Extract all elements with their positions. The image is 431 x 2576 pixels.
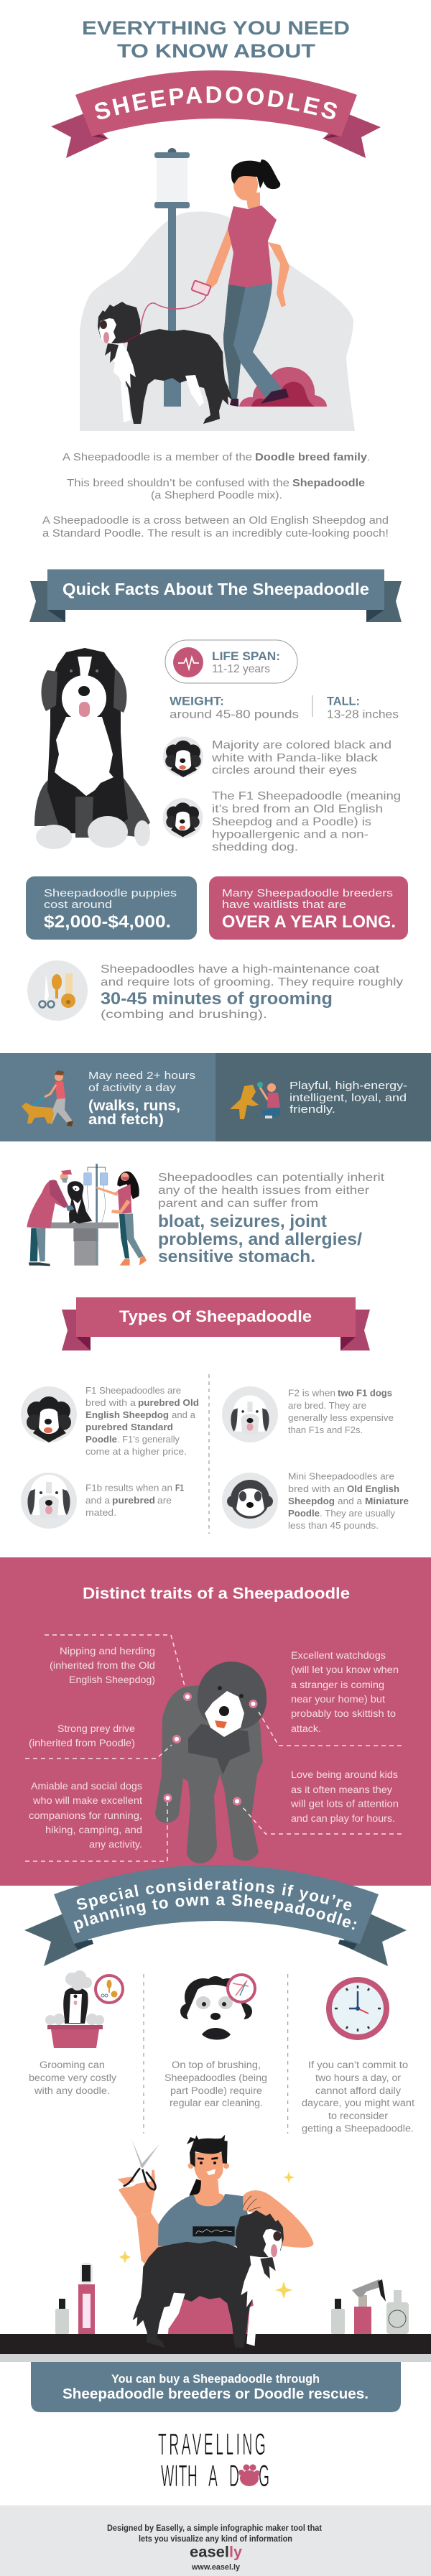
- type: mini: [222, 1471, 409, 1531]
- groomer: [117, 2135, 314, 2265]
- type: F1: purebred Standard: [85, 1422, 173, 1432]
- type: mini: Old English: [347, 1484, 399, 1494]
- fact: coloring: circles around their eyes: [212, 764, 357, 777]
- trait: amiable: who will make excellent: [32, 1795, 142, 1806]
- fact: coloring: white with Panda-like black: [211, 752, 379, 764]
- consideration: grooming cost: Grooming can: [40, 2060, 105, 2070]
- trait: kids: Love being around kids: [291, 1769, 398, 1780]
- weight stat: [170, 695, 299, 721]
- illustration: groomer with dog: [55, 2135, 409, 2348]
- consideration: ear cleaning: regular ear cleaning.: [170, 2098, 263, 2108]
- illustration: sitting sheepadoodle: [34, 648, 150, 849]
- trait: prey drive: (inherited from Poodle): [29, 1738, 135, 1748]
- life span pill: 11-12 years: [212, 663, 270, 675]
- icon: person walking dog: [22, 1070, 73, 1126]
- panel: temperament: intelligent, loyal, and: [289, 1092, 407, 1104]
- consideration: time commitment: cannot afford daily: [315, 2085, 401, 2096]
- icon: dog face with cotton swabs: [180, 1975, 255, 2040]
- consideration: ear cleaning: On top of brushing,: [172, 2060, 261, 2070]
- type: F2: than F1s and F2s.: [288, 1425, 363, 1435]
- health text: parent and can suffer from: [158, 1197, 318, 1210]
- trait: kids: [290, 1769, 399, 1824]
- intro text: This breed shouldn’t be confused with the: [67, 478, 289, 489]
- consideration: time commitment: daycare, you might want: [302, 2098, 414, 2108]
- type: F1: [21, 1386, 199, 1457]
- type: F2: are bred. They are: [288, 1401, 366, 1411]
- fact: F1 hypoallergenic: hypoallergenic and a non-: [212, 829, 369, 840]
- icon: heartbeat: [173, 647, 203, 677]
- health text: problems, and allergies/: [158, 1230, 362, 1249]
- type: F1b: [21, 1473, 184, 1529]
- trait: watchdogs: [291, 1650, 399, 1734]
- doctor: [27, 1169, 72, 1266]
- icon: dog in bath tub: [45, 1970, 104, 2048]
- type: F2: F2 is when: [288, 1388, 335, 1398]
- callout: where to buy: Sheepadoodle breeders or Doodle rescues.: [62, 2386, 369, 2402]
- type: F1: come at a higher price.: [85, 1447, 187, 1457]
- callout: waitlists: OVER A YEAR LONG.: [222, 912, 396, 932]
- groomer apron: [168, 2284, 259, 2334]
- trait: kids: will get lots of attention: [290, 1799, 399, 1809]
- type: F1b: F1b results when an: [85, 1483, 172, 1493]
- health text: Sheepadoodles can potentially inherit: [158, 1172, 385, 1184]
- grooming table: [0, 2334, 431, 2362]
- small dog on table: [66, 1181, 92, 1223]
- icon: person playing with dog: [230, 1082, 280, 1119]
- logo: travelling with a dog: [158, 2428, 269, 2493]
- trait: watchdogs: attack.: [291, 1723, 321, 1734]
- intro text: (a Shepherd Poodle mix).: [151, 490, 282, 501]
- logo: travelling with a dog: G: [259, 2460, 269, 2493]
- icon: grooming tools: [27, 960, 88, 1021]
- type: F1b: F1: [175, 1483, 184, 1493]
- trait: nipping: [50, 1646, 155, 1685]
- grooming text: (combing and brushing).: [101, 1009, 267, 1021]
- fact: F1 hypoallergenic: it’s bred from an Old English: [212, 803, 383, 815]
- footer: [0, 2506, 431, 2576]
- intro text: Shepadoodle: [292, 478, 365, 489]
- callout: puppy cost: [26, 876, 197, 940]
- grooming text: [101, 963, 403, 1021]
- heading ribbon: special considerations: Special considerations if you’re: [76, 1878, 352, 1911]
- life span pill: [165, 640, 297, 683]
- consideration: ear cleaning: part Poodle) require: [170, 2085, 262, 2096]
- illustration: standing dog: [155, 1662, 267, 1863]
- consideration: time commitment: to reconsider: [328, 2111, 389, 2121]
- heading ribbon: types: Types Of Sheepadoodle: [119, 1307, 312, 1325]
- health text: any of the health issues from either: [158, 1185, 370, 1197]
- icon: paw: [238, 2464, 260, 2486]
- title: [82, 17, 350, 62]
- footer: lets you visualize any kind of information: [139, 2535, 292, 2544]
- fact: F1 hypoallergenic: Sheepdog and a Poodle) is: [212, 816, 371, 828]
- type: F2: [222, 1386, 394, 1442]
- consideration: time commitment: two hours a day, or: [315, 2072, 402, 2083]
- life span pill: LIFE SPAN:: [212, 650, 280, 663]
- intro text: Doodle breed family: [255, 452, 367, 463]
- panel: activity: of activity a day: [88, 1082, 177, 1094]
- lamp post: [154, 148, 190, 407]
- icon: mini sheepadoodle: [227, 1480, 273, 1519]
- callout lines and dots: [25, 1635, 402, 1861]
- type: F1b: purebred: [112, 1496, 155, 1506]
- trait: watchdogs: near your home) but: [291, 1694, 385, 1705]
- panel: temperament: friendly.: [289, 1103, 335, 1116]
- panel: activity: [0, 1053, 216, 1141]
- trait: amiable: any activity.: [89, 1839, 142, 1850]
- type: mini: and a: [338, 1496, 362, 1506]
- health text: [158, 1172, 385, 1266]
- type: mini: Miniature: [365, 1496, 409, 1506]
- trait: amiable: [29, 1781, 142, 1850]
- title ribbon: Sheepadoodles: SHEEPADOODLES: [95, 86, 337, 119]
- type: mini: less than 45 pounds.: [288, 1521, 379, 1531]
- heading: Distinct traits of a Sheepadoodle: [83, 1585, 350, 1602]
- consideration: grooming cost: with any doodle.: [34, 2085, 110, 2096]
- fact: coloring: [163, 737, 391, 777]
- logo: travelling with a dog: WITH: [161, 2460, 198, 2493]
- heading ribbon: special considerations: planning to own a Sheepadoodle:: [73, 1894, 356, 1933]
- footer: Designed by Easelly, a simple infographic maker tool that: [107, 2524, 322, 2533]
- type: F1b: are: [157, 1496, 172, 1506]
- height stat: [327, 695, 399, 721]
- intro text: a Standard Poodle. The result is an incredibly cute-looking pooch!: [42, 528, 389, 539]
- intro text: .: [367, 452, 370, 463]
- footer: ly: [229, 2544, 242, 2560]
- trait: amiable: companions for running,: [29, 1810, 142, 1821]
- nurse: [96, 1172, 147, 1266]
- type: F2: generally less expensive: [288, 1413, 394, 1423]
- type: F1b: mated.: [85, 1508, 116, 1518]
- type: F1: and a: [172, 1410, 195, 1420]
- dog: [98, 302, 232, 424]
- type: mini: Poodle: [288, 1509, 320, 1519]
- fact: F1 hypoallergenic: shedding dog.: [212, 841, 298, 853]
- trait: kids: as it often means they: [291, 1784, 392, 1795]
- hero illustration: woman walking dog: [80, 148, 355, 431]
- health text: bloat, seizures, joint: [158, 1212, 327, 1231]
- fact: coloring: Majority are colored black and: [212, 739, 391, 751]
- panel: activity: May need 2+ hours: [88, 1070, 195, 1082]
- grooming text: 30-45 minutes of grooming: [101, 989, 333, 1009]
- type: mini: . They are usually: [320, 1509, 396, 1519]
- dog collar: [124, 334, 140, 343]
- consideration: time commitment: getting a Sheepadoodle.: [302, 2123, 414, 2133]
- callout: waitlists: Many Sheepadoodle breeders: [222, 887, 393, 899]
- heading ribbon: quick facts: [29, 569, 402, 622]
- illustration: vets with dog: [27, 1164, 147, 1266]
- trait: nipping: Nipping and herding: [60, 1646, 155, 1657]
- title ribbon: Sheepadoodles: [51, 70, 381, 158]
- icon: grooming badge: [96, 1975, 123, 2003]
- trait: nipping: (inherited from the Old: [50, 1660, 155, 1671]
- health text: sensitive stomach.: [158, 1247, 315, 1266]
- logo: travelling with a dog: TRAVELLING: [158, 2428, 266, 2462]
- leash: [140, 295, 206, 331]
- type: mini: bred with an: [288, 1484, 345, 1494]
- callout: waitlists: [209, 876, 408, 940]
- weight stat: around 45-80 pounds: [170, 708, 299, 721]
- height stat: 13-28 inches: [327, 708, 399, 721]
- logo: travelling with a dog: D: [229, 2460, 239, 2493]
- intro text: [42, 452, 389, 539]
- type: F2: two F1 dogs: [338, 1388, 392, 1398]
- footer: easel: [190, 2544, 229, 2560]
- height stat: TALL:: [327, 695, 360, 708]
- panel: distinct traits: [0, 1557, 431, 1886]
- fact: F1 hypoallergenic: [162, 790, 401, 853]
- callout: where to buy: You can buy a Sheepadoodle through: [111, 2372, 320, 2386]
- callout: puppy cost: cost around: [44, 899, 112, 911]
- type: mini: Mini Sheepadoodles are: [288, 1471, 394, 1481]
- dog on table: [133, 2210, 284, 2348]
- trait: watchdogs: Excellent watchdogs: [291, 1650, 386, 1661]
- type: F1b: and a: [85, 1496, 110, 1506]
- type: F1: F1 Sheepadoodles are: [85, 1386, 181, 1396]
- consideration: grooming cost: [29, 1970, 123, 2096]
- intro text: A Sheepadoodle is a cross between an Old English Sheepdog and: [42, 515, 389, 527]
- trait: watchdogs: a stranger is coming: [291, 1680, 384, 1690]
- heading ribbon: special considerations: [24, 1865, 407, 1966]
- type: F1: . F1’s generally: [117, 1435, 180, 1445]
- footer: www.easel.ly: [191, 2563, 241, 2572]
- trait: watchdogs: (will let you know when: [291, 1664, 399, 1675]
- type: F1: purebred Old: [138, 1398, 199, 1408]
- bush: [239, 367, 327, 407]
- callout: where to buy: [31, 2362, 401, 2412]
- callout: waitlists: have waitlists that are: [222, 899, 346, 911]
- trait: amiable: hiking, camping, and: [45, 1825, 142, 1835]
- exam table: [49, 1223, 119, 1266]
- panel: activity: (walks, runs,: [88, 1098, 180, 1113]
- heading ribbon: quick facts: Quick Facts About The Sheepadoodle: [62, 580, 369, 598]
- product bottles: [55, 2263, 409, 2334]
- trait: kids: and can play for hours.: [291, 1813, 395, 1824]
- title: EVERYTHING YOU NEED: [82, 17, 350, 39]
- consideration: ear cleaning: [164, 1975, 267, 2108]
- weight stat: WEIGHT:: [170, 695, 224, 708]
- intro text: A Sheepadoodle is a member of the: [62, 452, 252, 463]
- trait: prey drive: Strong prey drive: [57, 1723, 135, 1734]
- trait: amiable: Amiable and social dogs: [31, 1781, 142, 1792]
- type: mini: Sheepdog: [288, 1496, 335, 1506]
- sparkles: [119, 2172, 295, 2299]
- trait: prey drive: [29, 1723, 135, 1748]
- trait: nipping: English Sheepdog): [69, 1674, 155, 1685]
- icon: clock: [326, 1977, 389, 2040]
- consideration: ear cleaning: Sheepadoodles (being: [164, 2072, 267, 2083]
- type: F1: English Sheepdog: [85, 1410, 169, 1420]
- panel: temperament: Playful, high-energy-: [289, 1080, 407, 1092]
- consideration: grooming cost: become very costly: [29, 2072, 116, 2083]
- background blob: [80, 211, 355, 431]
- callout: puppy cost: $2,000-$4,000.: [44, 912, 171, 932]
- panel: temperament: [216, 1053, 431, 1141]
- grooming text: and require lots of grooming. They require roughly: [101, 976, 403, 988]
- consideration: time commitment: [302, 1977, 414, 2133]
- fact: F1 hypoallergenic: The F1 Sheepadoodle (meaning: [212, 790, 401, 802]
- woman: [191, 159, 289, 407]
- consideration: time commitment: If you can’t commit to: [308, 2060, 408, 2070]
- type: F1: bred with a: [85, 1398, 136, 1408]
- trait: watchdogs: probably too skittish to: [291, 1708, 396, 1719]
- type: F1: Poodle: [85, 1435, 117, 1445]
- callout: puppy cost: Sheepadoodle puppies: [44, 887, 177, 899]
- heading ribbon: types: [62, 1297, 370, 1350]
- title: TO KNOW ABOUT: [117, 40, 316, 62]
- grooming text: Sheepadoodles have a high-maintenance coat: [101, 963, 380, 976]
- panel: activity: and fetch): [88, 1112, 164, 1128]
- iv stand: [84, 1164, 108, 1223]
- logo: travelling with a dog: A: [208, 2460, 218, 2493]
